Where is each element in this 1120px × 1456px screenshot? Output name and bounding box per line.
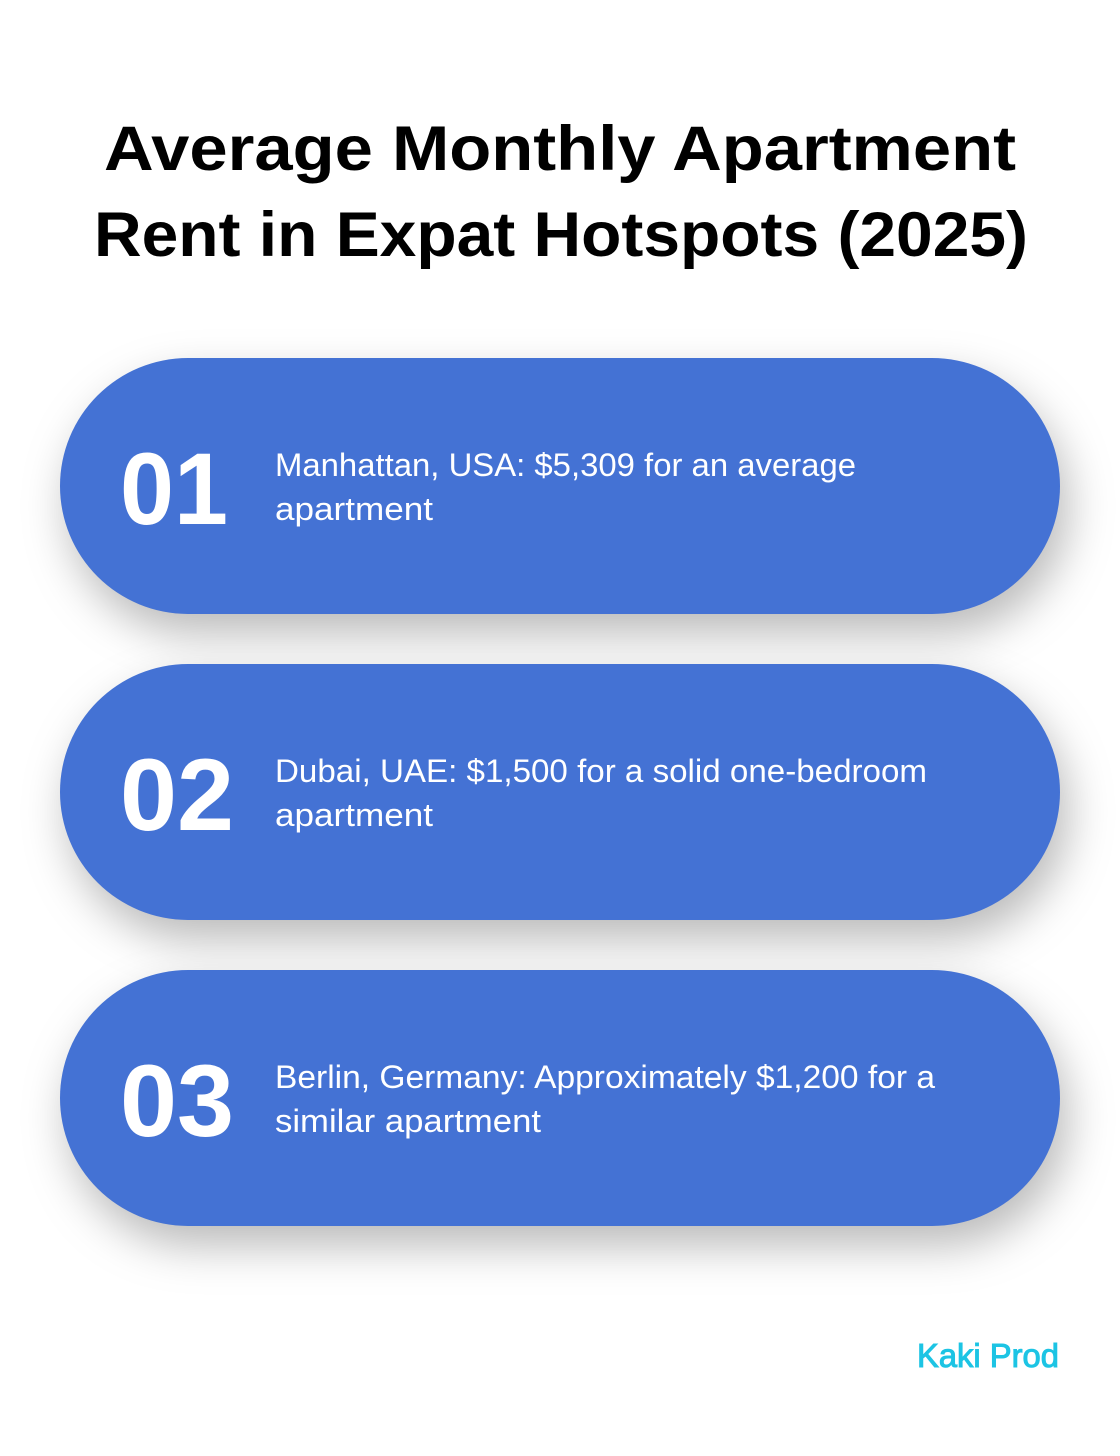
text: Berlin rent: similar apartment (275, 1103, 541, 1139)
text: Dubai rent: Dubai, UAE: $1,500 for a solid one-bedroom (275, 753, 927, 789)
title: Rent in Expat Hotspots (2025) (94, 200, 1028, 270)
number 03: 03 (120, 1044, 234, 1158)
text: Berlin rent (275, 1059, 935, 1139)
panel: Manhattan (60, 358, 1060, 614)
panel: Dubai (60, 664, 1060, 920)
number 02: 02 (120, 738, 234, 852)
panel: Berlin (60, 970, 1060, 1226)
logo: Kaki Prod: Kaki Prod (917, 1337, 1059, 1374)
text: Berlin rent: Berlin, Germany: Approximately $1,200 for a (275, 1059, 935, 1095)
text: Manhattan rent: Manhattan, USA: $5,309 for an average (275, 447, 856, 483)
number 01: 01 (120, 432, 228, 546)
title (94, 114, 1028, 270)
text: Dubai rent: apartment (275, 797, 433, 833)
text: Manhattan rent (275, 447, 856, 527)
title: Average Monthly Apartment (104, 114, 1016, 184)
text: Dubai rent (275, 753, 927, 833)
text: Manhattan rent: apartment (275, 491, 433, 527)
